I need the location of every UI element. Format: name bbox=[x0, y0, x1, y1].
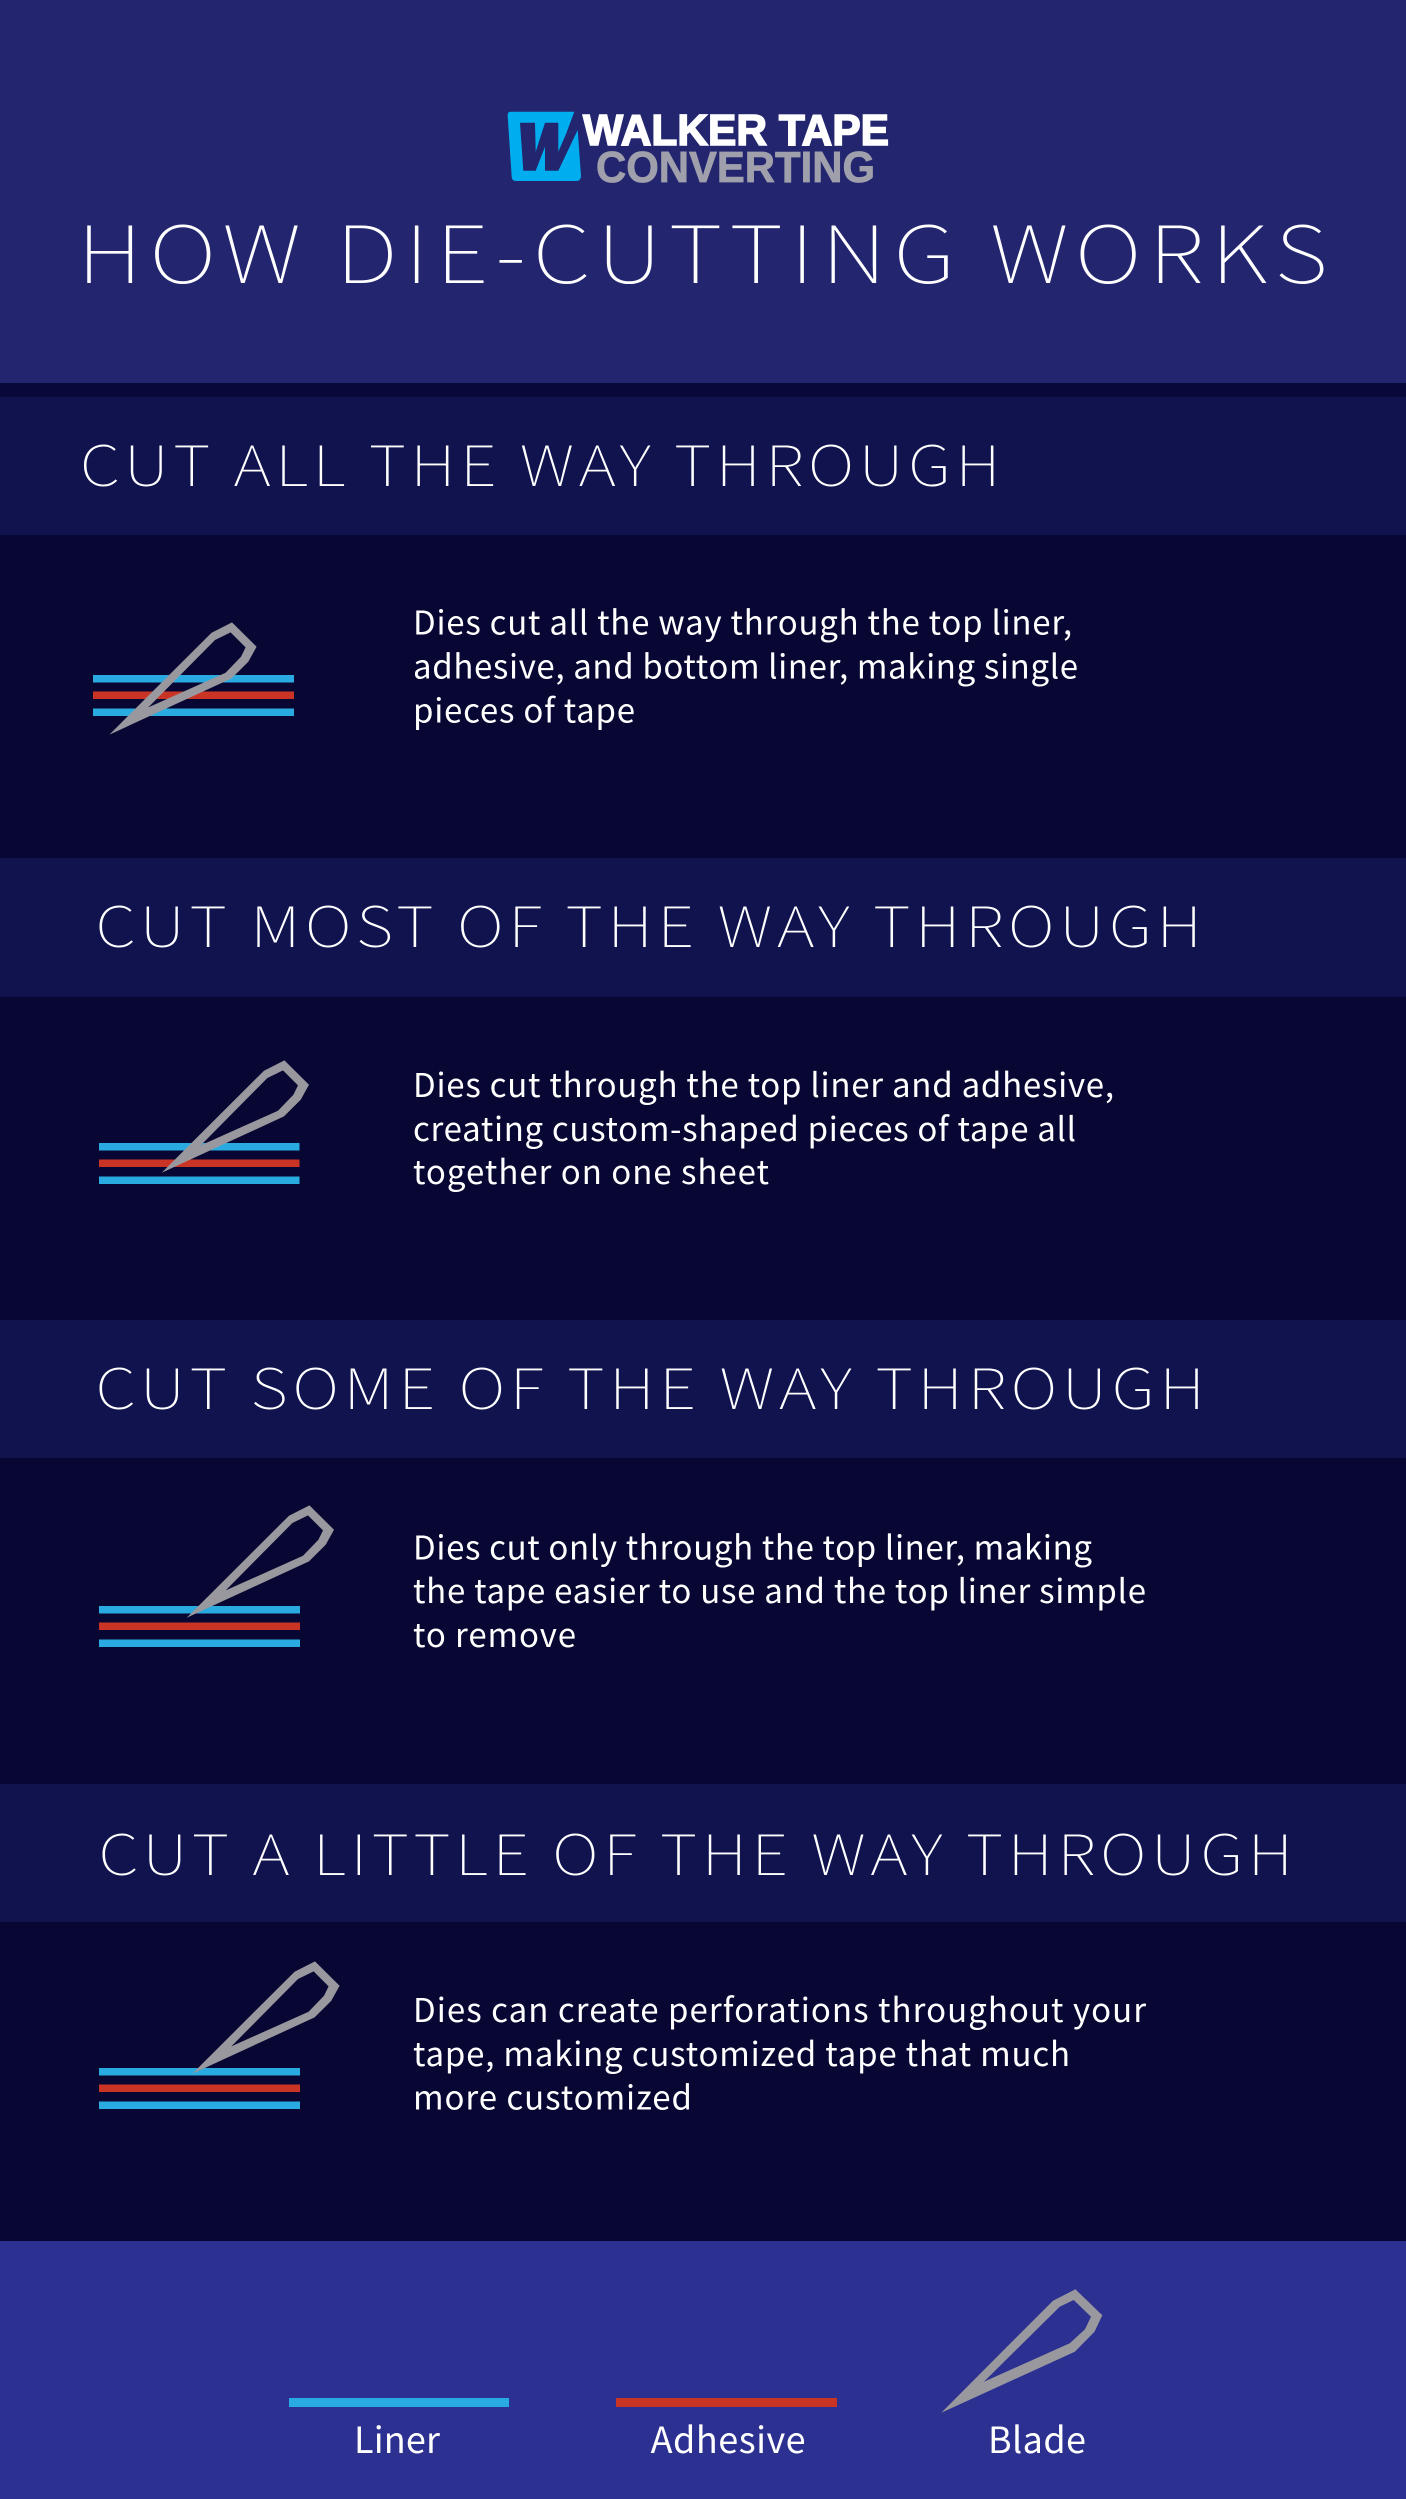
section 4 description: Dies can create perforations throughout your bbox=[413, 1984, 1146, 2032]
legend: liner: Liner bbox=[354, 2412, 441, 2464]
legend: liner bbox=[289, 2398, 509, 2464]
section 1 description: Dies cut all the way through the top liner, bbox=[413, 596, 1072, 644]
header panel bbox=[0, 0, 1406, 383]
section 2 heading band: CUT MOST OF THE WAY THROUGH bbox=[96, 883, 1206, 964]
section 3 heading band bbox=[0, 1320, 1406, 1458]
section 1 heading band bbox=[0, 397, 1406, 535]
legend panel bbox=[0, 2241, 1406, 2499]
section 1 bbox=[0, 397, 1406, 735]
diagram: cut a little of the way through bbox=[99, 1961, 340, 2109]
section 1 heading band: CUT ALL THE WAY THROUGH bbox=[80, 422, 1005, 503]
section 2 description: creating custom-shaped pieces of tape all bbox=[413, 1103, 1076, 1151]
legend: blade: Blade bbox=[988, 2412, 1086, 2464]
section 4 heading band bbox=[0, 1784, 1406, 1922]
logo wordmark bbox=[583, 106, 889, 192]
legend: adhesive: Adhesive bbox=[651, 2412, 806, 2464]
logo icon bbox=[508, 112, 581, 181]
diagram: cut some of the way through bbox=[99, 1505, 334, 1647]
section 1 description: adhesive, and bottom liner, making single bbox=[413, 640, 1078, 688]
diagram: cut most of the way through bbox=[99, 1060, 309, 1184]
section 4 bbox=[0, 1784, 1406, 2120]
section 2 bbox=[0, 858, 1406, 1194]
logo wordmark: CONVERTING bbox=[596, 143, 875, 192]
divider stripe bbox=[0, 383, 1406, 397]
section 2 description: together on one sheet bbox=[413, 1146, 769, 1194]
section 4 description: tape, making customized tape that much bbox=[413, 2028, 1070, 2076]
section 3 bbox=[0, 1320, 1406, 1657]
section 4 description bbox=[413, 1984, 1146, 2120]
section 3 description: to remove bbox=[413, 1609, 576, 1657]
diagram: cut all the way through bbox=[93, 622, 294, 735]
section 2 description bbox=[413, 1059, 1114, 1194]
section 3 description bbox=[413, 1522, 1146, 1657]
logo bbox=[508, 106, 889, 192]
section 1 description bbox=[413, 596, 1078, 732]
section 3 heading band: CUT SOME OF THE WAY THROUGH bbox=[96, 1345, 1210, 1426]
section 4 description: more customized bbox=[413, 2072, 692, 2120]
section 3 description: the tape easier to use and the top liner simple bbox=[413, 1565, 1146, 1613]
section 1 description: pieces of tape bbox=[413, 684, 635, 732]
logo wordmark: WALKER TAPE bbox=[583, 106, 889, 155]
section 4 heading band: CUT A LITTLE OF THE WAY THROUGH bbox=[98, 1811, 1298, 1892]
legend: adhesive bbox=[616, 2398, 837, 2464]
title: HOW DIE-CUTTING WORKS bbox=[77, 191, 1335, 306]
legend: blade bbox=[941, 2289, 1102, 2464]
section 2 heading band bbox=[0, 858, 1406, 997]
section 3 description: Dies cut only through the top liner, making bbox=[413, 1522, 1092, 1570]
section 2 description: Dies cut through the top liner and adhesive, bbox=[413, 1059, 1114, 1107]
